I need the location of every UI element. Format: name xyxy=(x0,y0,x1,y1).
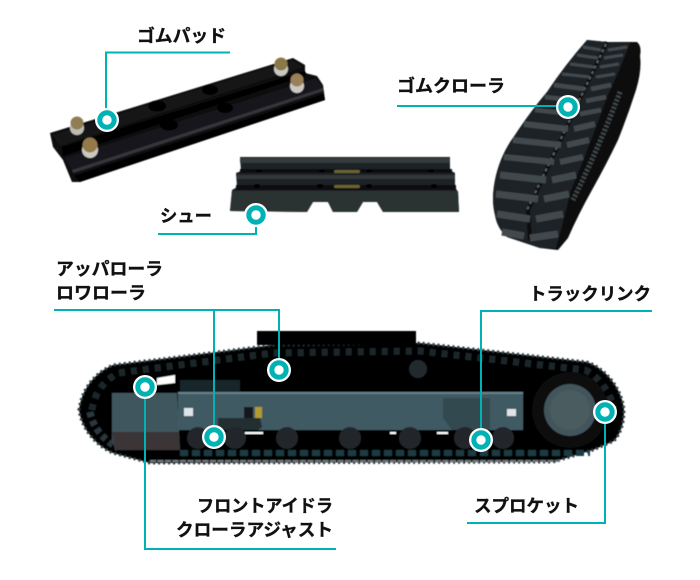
callout line: front idler xyxy=(145,387,336,549)
marker: track link xyxy=(469,428,493,452)
marker: rubber crawler xyxy=(556,95,580,119)
frame xyxy=(178,393,523,430)
callout line: rubber pad xyxy=(106,52,230,120)
lower track xyxy=(180,450,590,456)
callout line: track link xyxy=(481,311,652,440)
track links xyxy=(92,351,614,410)
callout line: shoe xyxy=(158,215,256,234)
label: upper roller: アッパローラ xyxy=(56,259,163,279)
frame upper shade xyxy=(180,380,240,393)
photo: undercarriage xyxy=(79,331,624,463)
photo: rubber pad xyxy=(50,58,325,182)
photo: shoe xyxy=(230,157,459,212)
label: front idler: フロントアイドラ xyxy=(197,496,333,516)
label: sprocket: スプロケット xyxy=(474,496,579,516)
label: crawler adjuster: クローラアジャスト xyxy=(176,520,333,540)
label: lower roller: ロワローラ xyxy=(56,283,146,303)
rollers xyxy=(187,427,209,449)
label: track link: トラックリンク xyxy=(529,284,651,304)
upper roller xyxy=(409,360,427,378)
callout line: sprocket xyxy=(467,412,605,523)
photo: rubber crawler xyxy=(493,40,641,250)
marker: sprocket xyxy=(593,400,617,424)
label: shoe: シュー xyxy=(160,206,212,226)
sprocket xyxy=(532,372,608,448)
label: rubber pad: ゴムパッド xyxy=(137,26,226,46)
marker: lower roller xyxy=(202,425,226,449)
label: rubber crawler: ゴムクローラ xyxy=(397,76,505,96)
idler side xyxy=(112,393,180,450)
callout line: rubber crawler xyxy=(397,105,568,107)
track outline xyxy=(79,343,624,463)
top bump xyxy=(257,331,416,345)
opening xyxy=(157,375,175,385)
marker: shoe xyxy=(244,203,268,227)
marker: rubber pad xyxy=(95,108,119,132)
lower-left bend links xyxy=(90,412,118,448)
marker: upper roller xyxy=(267,358,291,382)
small gaps xyxy=(245,432,263,434)
callout line: upper and lower rollers xyxy=(54,310,279,437)
marker: front idler xyxy=(133,375,157,399)
